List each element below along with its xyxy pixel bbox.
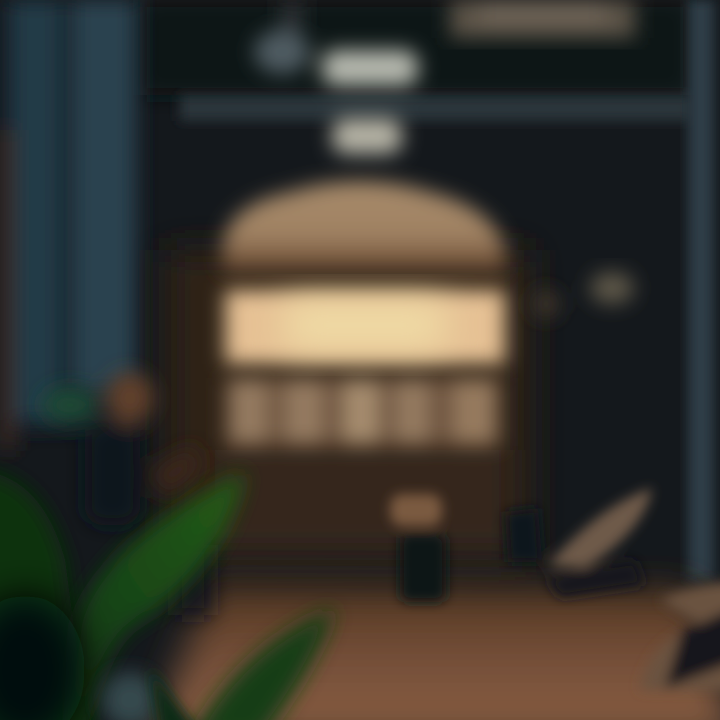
right column [688, 0, 714, 580]
ceiling beam [180, 95, 690, 121]
floor [150, 585, 720, 720]
icon: lounge chair right [505, 488, 652, 598]
panel: glowing band [225, 290, 505, 364]
icon: seated figure at left [42, 372, 211, 615]
icon: ceiling lights [254, 0, 418, 154]
ceiling shadow [140, 0, 690, 95]
icon: wall lights [532, 272, 634, 318]
icon: stool [390, 494, 446, 602]
panel: lamp dome [222, 181, 505, 272]
panel: warm back wall [165, 250, 530, 560]
panel: lower slats [225, 378, 500, 446]
panel: top right ceiling fixture [450, 0, 635, 38]
panel: left window [0, 0, 140, 450]
icon: chair bottom right [640, 582, 720, 690]
icon: foreground plant [0, 470, 335, 720]
